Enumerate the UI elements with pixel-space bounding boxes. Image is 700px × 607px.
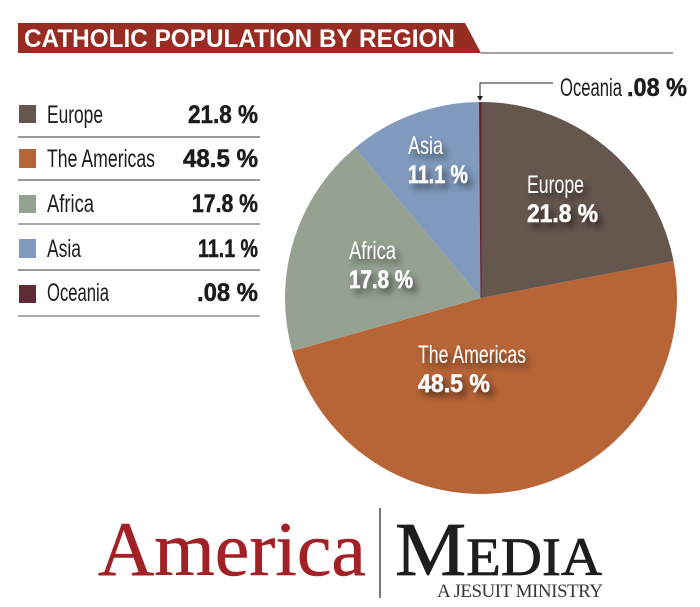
logo: America Media	[98, 506, 603, 602]
pie label: Europe: 21.8 %	[527, 200, 598, 228]
logo: America Media: MEDIA	[395, 508, 602, 592]
legend row: Asia	[18, 235, 260, 270]
legend table	[18, 101, 260, 316]
pie label: Asia	[408, 132, 468, 189]
legend row: Europe	[18, 101, 260, 137]
legend row: Oceania: Oceania	[47, 279, 109, 307]
logo: America Media: A JESUIT MINISTRY	[437, 581, 603, 602]
legend row: Asia: 11.1 %	[198, 235, 258, 263]
legend row: Africa	[18, 190, 260, 224]
pie label: Europe	[527, 171, 598, 228]
logo: America Media: America	[98, 506, 366, 592]
legend row: The Americas: 48.5 %	[183, 145, 258, 173]
pie label: Asia: Asia	[408, 132, 443, 160]
pie label: Africa: 17.8 %	[349, 266, 413, 294]
pie label: The Americas: 48.5 %	[418, 370, 490, 398]
pie chart	[285, 102, 677, 494]
callout: Oceania: Oceania	[560, 74, 622, 102]
slice: Europe	[481, 102, 673, 298]
pie label: Europe: Europe	[527, 171, 584, 199]
legend row: The Americas: The Americas	[47, 145, 155, 173]
pie label: Africa	[349, 237, 413, 294]
title banner	[18, 23, 673, 53]
legend row: Europe: Europe	[47, 101, 103, 129]
slice: Oceania	[479, 102, 482, 298]
slice: The Americas	[292, 261, 677, 494]
pie label: Asia: 11.1 %	[408, 161, 468, 189]
legend row: The Americas	[18, 145, 260, 180]
legend row: Europe: 21.8 %	[188, 101, 258, 129]
pie label: The Americas	[418, 341, 526, 398]
pie label: The Americas: The Americas	[418, 341, 526, 369]
legend row: Oceania	[18, 279, 260, 316]
legend row: Asia: Asia	[47, 235, 81, 263]
slice: Asia	[355, 102, 481, 298]
callout: Oceania	[477, 74, 687, 102]
legend row: Oceania: .08 %	[197, 279, 258, 307]
title banner: CATHOLIC POPULATION BY REGION	[24, 25, 455, 53]
callout: Oceania: .08 %	[627, 74, 687, 102]
pie label: Africa: Africa	[349, 237, 396, 265]
legend row: Africa: Africa	[47, 190, 94, 218]
slice: Africa	[285, 148, 481, 351]
legend row: Africa: 17.8 %	[192, 190, 258, 218]
